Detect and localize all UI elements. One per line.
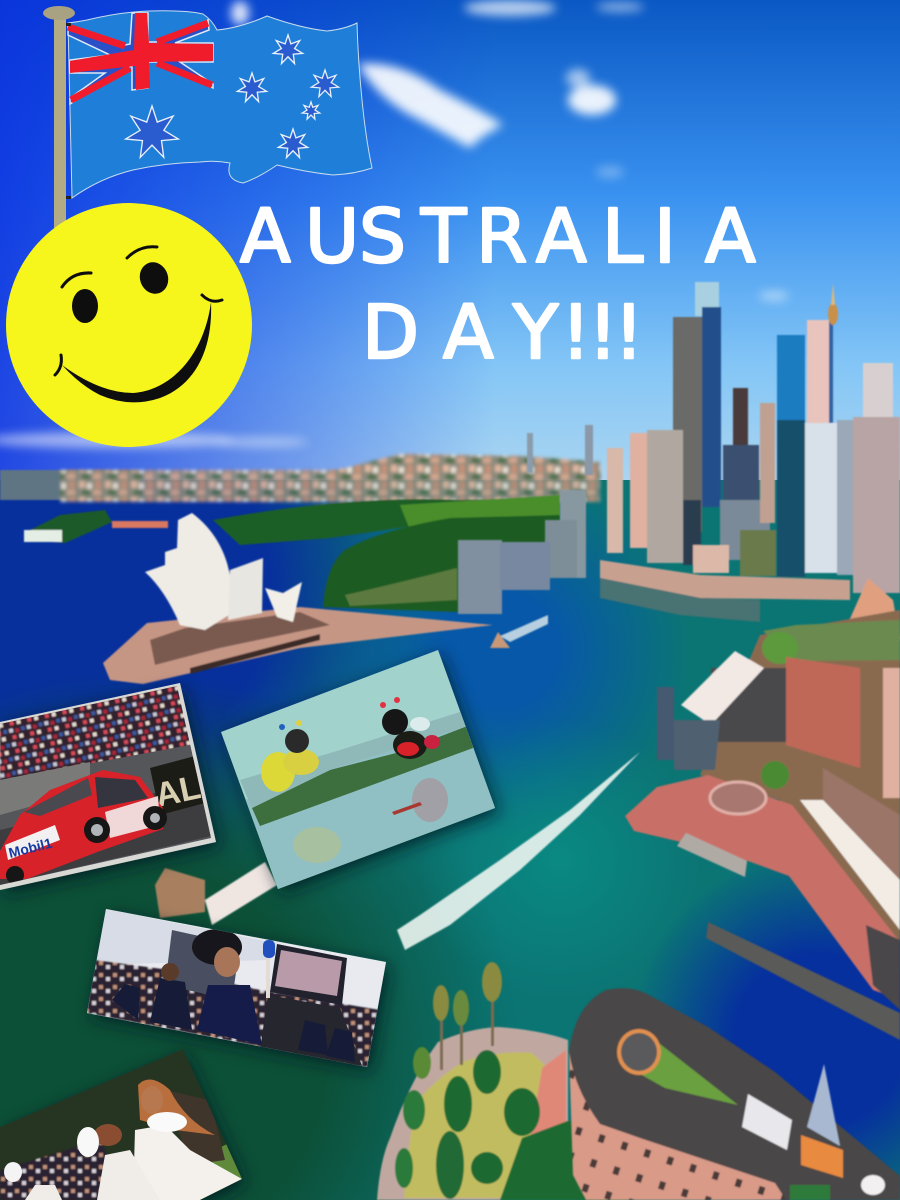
roof bbox=[569, 988, 900, 1200]
photo: race car: Mobil1 bbox=[7, 835, 54, 861]
title: AUSTRALIA bbox=[240, 194, 756, 280]
photo: balloons over water bbox=[221, 650, 495, 889]
round building bbox=[569, 988, 900, 1200]
trackside sign: AL bbox=[152, 768, 204, 815]
middle sail bbox=[228, 558, 263, 620]
facade bbox=[569, 1050, 790, 1200]
Opera House bbox=[103, 513, 493, 684]
balloon: right bee bbox=[380, 697, 440, 759]
orange facade bbox=[801, 1135, 843, 1178]
background sky bbox=[0, 0, 900, 490]
stars bbox=[126, 35, 339, 158]
clouds bbox=[0, 0, 789, 448]
flag cloth bbox=[68, 11, 372, 198]
title bbox=[240, 194, 756, 376]
large sails bbox=[145, 513, 232, 630]
pyramid bbox=[807, 1064, 840, 1146]
roof garden bbox=[640, 1044, 738, 1105]
photo: performers with drum bbox=[87, 909, 386, 1067]
photo: race car bbox=[0, 683, 216, 890]
flag pole bbox=[54, 18, 66, 228]
boat wakes bbox=[155, 615, 640, 950]
photo: dancers in white bbox=[0, 1049, 242, 1200]
foreground park bbox=[377, 962, 630, 1200]
title: DAY!!! bbox=[362, 290, 644, 376]
icon: smiley face bbox=[6, 203, 252, 447]
flag with pole bbox=[43, 6, 372, 228]
balloon: left bee bbox=[261, 720, 319, 792]
right foreshore bbox=[625, 610, 900, 1040]
white roof bbox=[742, 1094, 792, 1150]
skyscraper skyline bbox=[458, 282, 900, 640]
rowing boat bbox=[392, 802, 422, 815]
small sail bbox=[265, 582, 302, 622]
harbour water bbox=[0, 480, 900, 1200]
opera house base bbox=[103, 607, 493, 684]
union jack bbox=[68, 13, 213, 104]
far shoreline and city bbox=[0, 454, 600, 612]
palm trees bbox=[395, 962, 540, 1199]
